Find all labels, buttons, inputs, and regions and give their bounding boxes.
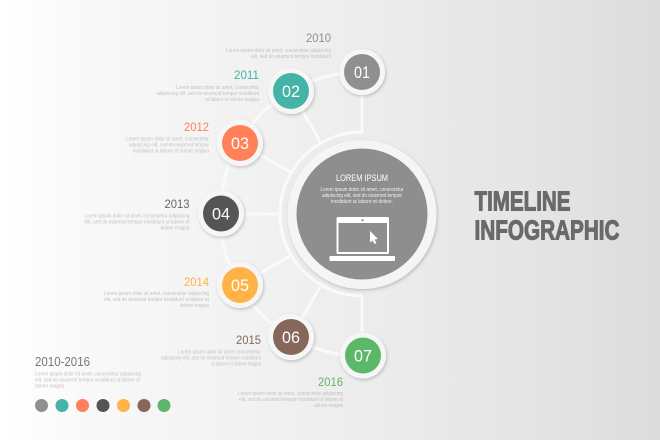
node 04: [198, 190, 244, 236]
node 07: 07: [354, 346, 372, 366]
text block: 2013: dolore magna: [160, 226, 190, 232]
icon: laptop with cursor: [330, 217, 395, 261]
text block: 2013: 2013: [164, 199, 190, 211]
text block: 2016: [238, 377, 344, 409]
text block: 2010: 2010: [306, 33, 331, 45]
text block: 2014: dolore magna: [180, 303, 209, 309]
central white ring: [288, 140, 436, 289]
central text: adipiscing elit, sed do eiusmod tempor: [322, 193, 402, 199]
text block: 2013: elit, sed do eiusmod tempor incididunt ut labore et: [84, 220, 190, 226]
central panel: [280, 132, 436, 296]
legend heading: 2010-2016: [35, 355, 90, 369]
text block: 2011: [157, 70, 260, 103]
text block: 2011: adipiscing elit, sed do eiusmod tempor incididunt: [157, 91, 260, 97]
text block: 2015: [161, 335, 262, 368]
central text: Lorem ipsum dolor sit amet, consectetur: [320, 187, 404, 193]
text block: 2016: Lorem ipsum dolor sit amet, consectetur adipiscing: [238, 391, 343, 397]
text block: 2015: 2015: [236, 335, 261, 347]
node 06: [268, 314, 314, 360]
central text: [320, 187, 404, 205]
node 04: 04: [212, 204, 230, 224]
text block: 2012: Lorem ipsum dolor sit amet, consectetur: [126, 136, 209, 142]
text block: 2011: Lorem ipsum dolor sit amet, consectetur: [176, 85, 259, 91]
title: TIMELINE: [474, 186, 570, 216]
text block: 2014: Lorem ipsum dolor sit amet, consectetur adipiscing: [104, 291, 209, 297]
node 01: 01: [354, 63, 370, 82]
text block: 2012: adipiscing elit, sed do eiusmod tempor: [129, 142, 209, 148]
central heading: LOREM IPSUM: [336, 173, 388, 183]
text block: 2011: 2011: [234, 70, 259, 82]
text block: 2013: Lorem ipsum dolor sit amet, consectetur adipiscing: [84, 214, 190, 220]
central left arc band: [280, 132, 362, 296]
node 03: [217, 120, 263, 166]
node 02: [268, 68, 314, 114]
legend text: Lorem ipsum dolor sit amet, consectetur adipiscing: [35, 372, 141, 378]
node 02: 02: [282, 82, 300, 101]
text block: 2016: dolore magna: [314, 403, 343, 409]
legend: [35, 355, 170, 412]
text block: 2010: [226, 33, 332, 60]
node 05: 05: [231, 276, 249, 295]
text block: 2016: 2016: [318, 377, 343, 389]
central text: incididunt ut labore et dolore.: [331, 199, 393, 205]
legend text: elit, sed do eiusmod tempor incididunt ut labore et: [35, 378, 141, 384]
text block: 2012: [126, 122, 209, 154]
text block: 2014: [104, 277, 210, 309]
text block: 2012: incididunt ut labore et dolore magna: [133, 148, 209, 154]
node 05: [217, 262, 263, 308]
title: [474, 186, 620, 246]
text block: 2015: adipiscing elit, sed do eiusmod tempor incididunt: [161, 356, 262, 362]
text block: 2014: 2014: [184, 277, 210, 289]
text block: 2011: ut labore et dolore magna: [205, 97, 259, 103]
text block: 2016: elit, sed do eiusmod tempor incididunt ut labore et: [239, 397, 344, 403]
legend text: [35, 372, 141, 390]
legend text: dolore magna: [35, 384, 64, 390]
text block: 2010: elit, sed do eiusmod tempor incididunt: [251, 54, 332, 60]
timeline connectors: [220, 72, 362, 356]
node 01: [339, 49, 385, 95]
text block: 2015: ut labore et dolore magna: [211, 362, 261, 368]
text block: 2010: Lorem ipsum dolor sit amet, consectetur adipiscing: [226, 48, 331, 54]
text block: 2013: [84, 199, 190, 232]
node 07: [340, 332, 386, 378]
central grey disc: [296, 148, 428, 280]
node 03: 03: [231, 134, 249, 153]
text block: 2014: elit, sed do eiusmod tempor incididunt ut labore et: [104, 297, 210, 303]
legend dots: [35, 399, 170, 412]
text block: 2012: 2012: [184, 122, 209, 134]
node 06: 06: [282, 328, 300, 347]
text block: 2015: Lorem ipsum dolor sit amet, consectetur: [178, 350, 261, 356]
